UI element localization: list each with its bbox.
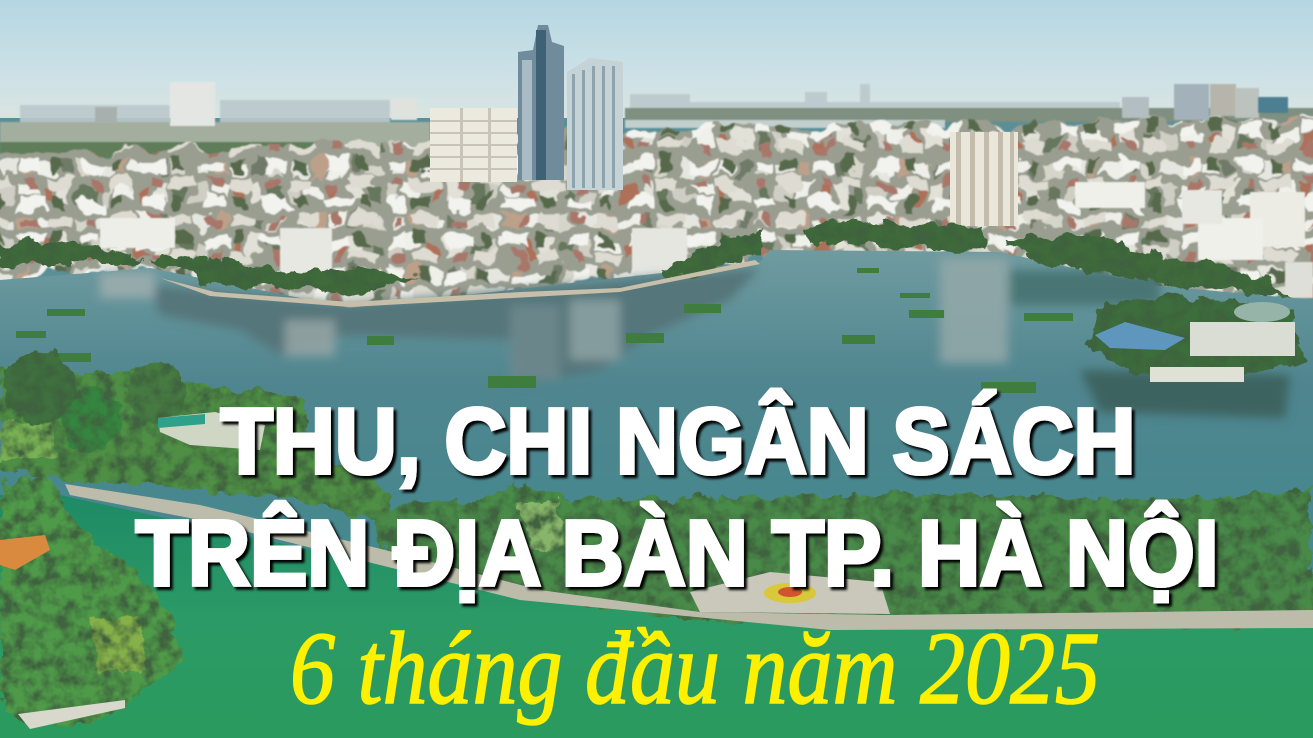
island pavilion on the right	[1082, 295, 1305, 382]
left bottom island with trees	[0, 475, 186, 722]
roof and island base	[0, 535, 125, 729]
promenade along lower shore	[65, 484, 1313, 630]
flower bed	[764, 583, 816, 603]
tower right of centre	[950, 132, 1018, 226]
far-left towers	[95, 82, 417, 126]
peninsula embankment	[160, 260, 760, 307]
lower green lake	[0, 495, 1313, 738]
sky	[0, 0, 1313, 118]
building reflections	[100, 258, 1290, 418]
central tree strip	[370, 482, 1313, 625]
far river and treeline	[0, 108, 1313, 158]
distant skyline	[20, 84, 1120, 125]
left shore trees	[0, 352, 400, 530]
tree line along far shore	[0, 220, 1290, 296]
far-right towers	[1122, 84, 1288, 120]
lake water	[0, 250, 1313, 640]
central towers	[430, 25, 623, 190]
title line 1: THU, CHI NGÂN SÁCH	[220, 389, 1136, 493]
water plants	[16, 268, 1073, 393]
subtitle: 6 tháng đầu năm 2025	[290, 611, 1100, 726]
title line 2: TRÊN ĐỊA BÀN TP. HÀ NỘI	[136, 501, 1218, 605]
mid-rise buildings	[100, 182, 1313, 298]
dense city blocks	[0, 118, 1313, 315]
plaza by the lake	[690, 572, 890, 614]
pavilion among left trees	[158, 412, 265, 450]
